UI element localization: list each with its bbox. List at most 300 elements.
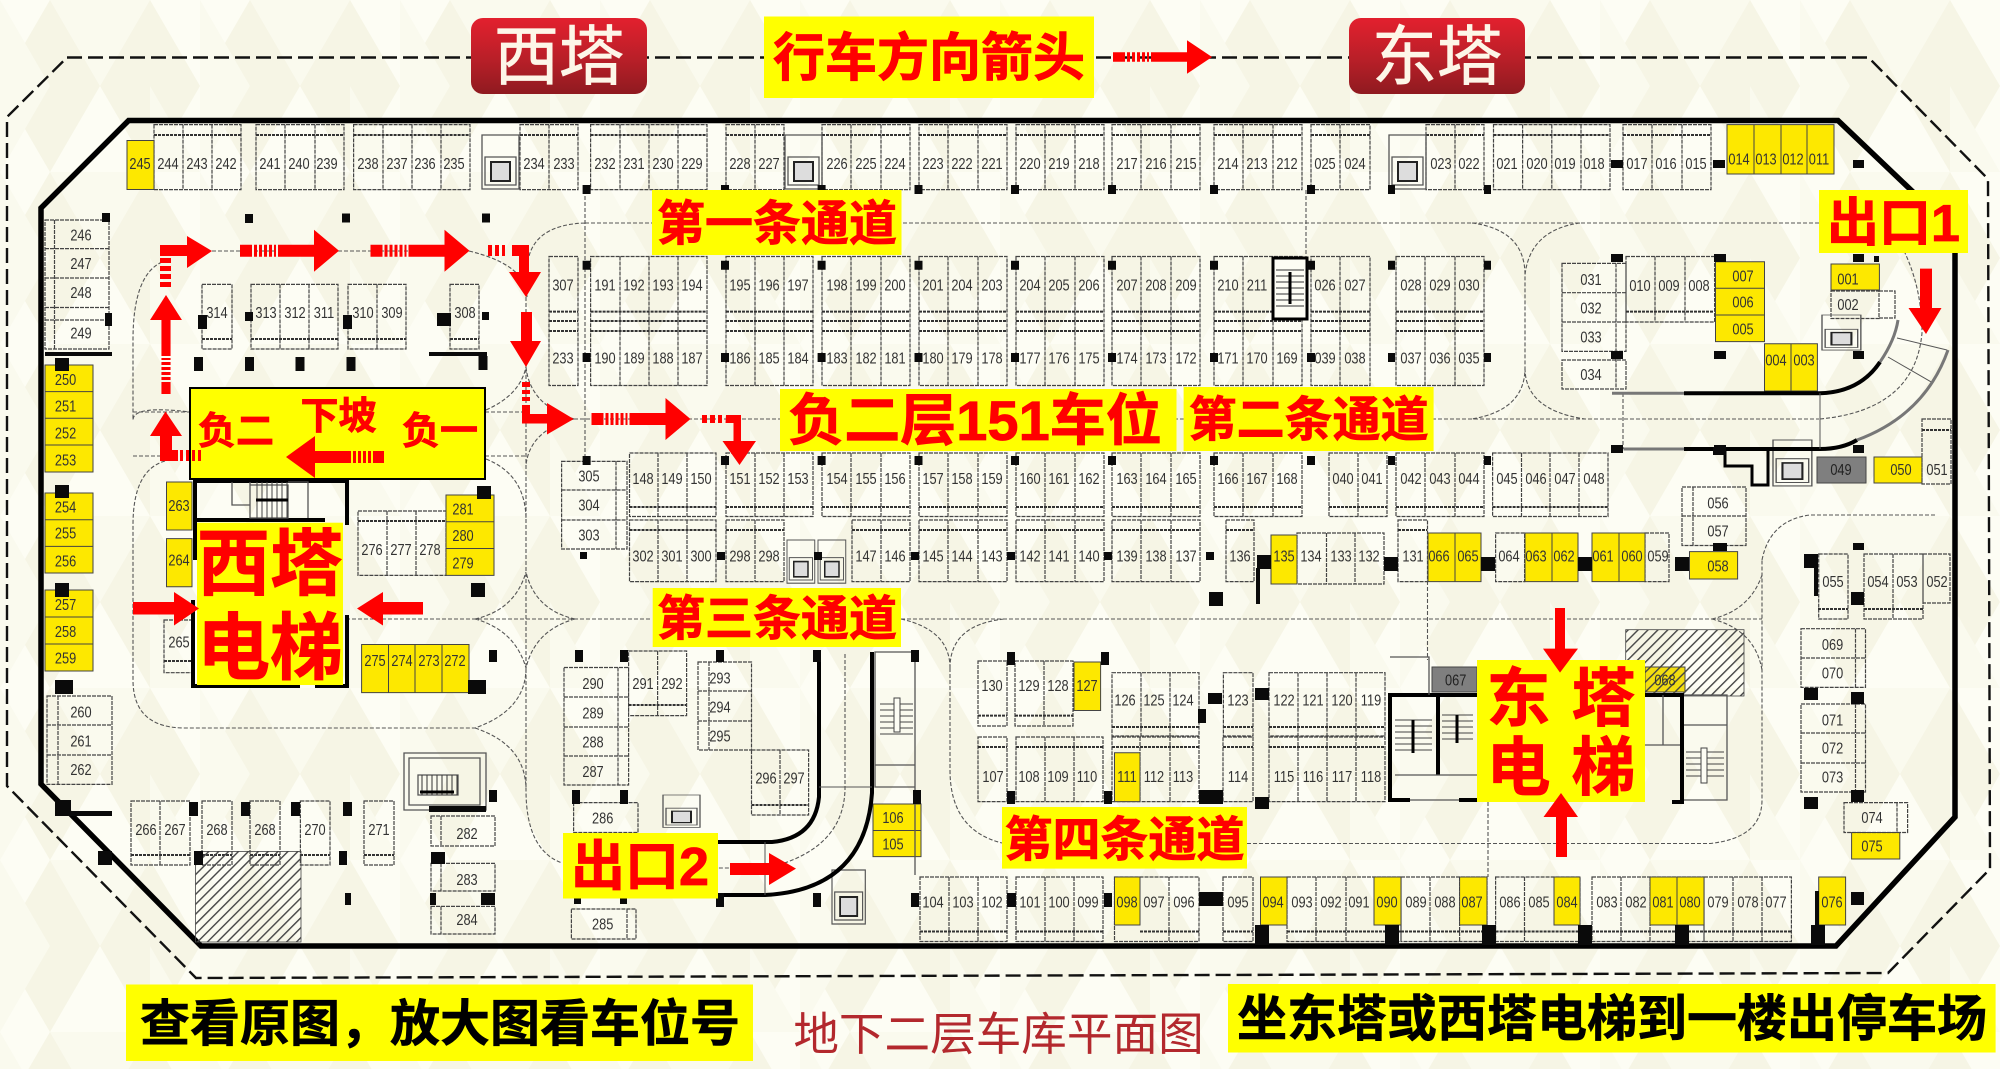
stall rows B, second aisle double row: 176	[1048, 350, 1070, 368]
label: exit 2: 出口2	[571, 837, 709, 897]
bottom stall row: 078	[1737, 894, 1759, 912]
footer: title: 地下二层车库平面图	[793, 1009, 1204, 1060]
south-west stalls 266-271, 282-284: 266	[135, 822, 157, 839]
stall row A, top wall: 230	[652, 156, 674, 173]
west side stalls: 261	[70, 733, 92, 751]
stall row A, top wall: 025	[1314, 156, 1336, 173]
stall rows B, second aisle double row: 192	[623, 277, 645, 295]
badge: west tower: 西塔	[494, 20, 624, 93]
stall row C: 158	[951, 471, 973, 488]
label: down ramp: 负二	[198, 411, 274, 453]
north-east stalls 001-010, 031-034: 032	[1580, 300, 1602, 318]
stall row D: 142	[1019, 548, 1041, 566]
stall row A, top wall: 238	[357, 156, 379, 173]
stall rows B, second aisle double row: 039	[1314, 350, 1336, 368]
stalls around west tower 263-281: 273	[418, 653, 440, 670]
south-west stalls 266-271, 282-284: 268	[254, 822, 276, 839]
stall row C: 045	[1496, 471, 1518, 488]
stall row A, top wall: 223	[922, 156, 944, 173]
east core stalls 107-130: 111	[1117, 769, 1137, 786]
stall row A, top wall: 220	[1019, 156, 1041, 173]
bottom stall row: 076	[1821, 894, 1843, 912]
stall row A, top wall: 012	[1782, 151, 1804, 169]
stall row D: 132	[1358, 548, 1380, 566]
stalls 285-305	[562, 461, 809, 939]
south-west stalls 266-271, 282-284: 268	[206, 822, 228, 839]
stall row A, top wall: 024	[1344, 156, 1366, 173]
bottom stall row: 101	[1019, 894, 1041, 912]
central-west island stalls 308-314: 308	[454, 305, 476, 322]
stall row A, top wall	[127, 125, 1834, 190]
west side stalls: 259	[55, 650, 76, 668]
arrow: route up from ramp	[150, 412, 201, 461]
stall rows B, second aisle double row: 208	[1145, 277, 1167, 295]
east stalls 049-057, 069-075: 054	[1867, 574, 1889, 591]
arrow: route corner to east 2	[522, 382, 574, 434]
label: down ramp: 负一	[402, 411, 478, 453]
bottom stall row: 092	[1320, 894, 1342, 912]
stall row D: 147	[855, 548, 877, 566]
stalls around west tower 263-281: 281	[452, 501, 474, 519]
east core stalls 107-130: 130	[981, 678, 1003, 695]
north-east stalls 001-010, 031-034: 004	[1765, 352, 1787, 370]
exit 1 ramp	[1612, 320, 1948, 485]
label: west tower elevator: 西塔	[197, 524, 343, 605]
stall row D: 141	[1048, 548, 1070, 566]
west side stalls: 255	[55, 525, 76, 543]
east stalls 049-057, 069-075: 074	[1861, 810, 1883, 827]
stall row A, top wall: 213	[1246, 156, 1268, 173]
bottom stall row: 081	[1652, 894, 1674, 912]
bottom stall row: 098	[1116, 894, 1138, 912]
stair and walls of west tower	[193, 481, 347, 686]
central-west island stalls 308-314: 314	[206, 305, 228, 322]
stall rows B, second aisle double row: 035	[1458, 350, 1480, 368]
stall rows B, second aisle double row: 026	[1314, 277, 1336, 295]
stalls 285-305: 297	[783, 770, 805, 788]
stall row C: 160	[1019, 471, 1041, 488]
stall row A, top wall: 212	[1276, 156, 1298, 173]
north-east stalls 001-010, 031-034: 009	[1658, 278, 1680, 295]
arrow: east elevator from north	[1543, 608, 1578, 673]
bottom stall row: 082	[1625, 894, 1647, 912]
stair core central	[875, 652, 915, 875]
stall row C: 159	[981, 471, 1003, 488]
stall rows B, second aisle double row: 203	[981, 277, 1003, 295]
stall row A, top wall: 022	[1458, 156, 1480, 173]
bottom stall row: 084	[1556, 894, 1578, 912]
bottom stall row: 083	[1596, 894, 1618, 912]
driving route arrows	[133, 230, 1942, 885]
stall rows B, second aisle double row: 199	[855, 277, 877, 295]
west side stalls: 251	[55, 398, 76, 416]
stall row D	[630, 520, 1738, 584]
stall rows B, second aisle double row: 198	[826, 277, 848, 295]
stall row C: 150	[690, 471, 712, 488]
stall row A, top wall: 225	[855, 156, 877, 173]
west side stalls: 257	[55, 597, 76, 614]
south-west stalls 266-271, 282-284: 267	[164, 822, 186, 839]
stall row D: 136	[1229, 548, 1251, 566]
stalls 285-305: 296	[755, 770, 777, 788]
stall row A, top wall: 245	[129, 156, 151, 173]
label: down ramp	[190, 388, 485, 479]
stall rows B, second aisle double row: 204	[951, 277, 973, 295]
west side stalls: 253	[55, 452, 76, 470]
stall rows B, second aisle double row: 204	[1019, 277, 1041, 295]
stall rows B, second aisle double row: 172	[1175, 350, 1197, 368]
bottom stall row	[873, 804, 1846, 942]
east stalls 049-057, 069-075: 057	[1707, 523, 1729, 541]
stalls around west tower 263-281: 278	[419, 542, 441, 559]
stall rows B, second aisle double row: 038	[1344, 350, 1366, 368]
stall row D: 060	[1621, 548, 1643, 566]
label: east tower elevator: 电	[1486, 732, 1550, 804]
stall row A, top wall: 228	[729, 156, 751, 173]
stalls around west tower 263-281: 277	[390, 542, 412, 559]
label: down ramp: 下坡	[300, 396, 377, 438]
label: east tower elevator	[1477, 660, 1645, 804]
label: east tower elevator: 塔	[1572, 663, 1636, 735]
stall row D: 066	[1428, 548, 1450, 566]
bottom stall row: 103	[952, 894, 974, 912]
bottom stall row: 099	[1077, 894, 1099, 912]
badge: east tower: 东塔	[1372, 20, 1502, 93]
exit 2 ramp	[718, 652, 872, 895]
west side stalls: 258	[55, 624, 76, 641]
bottom stall row: 088	[1434, 894, 1456, 912]
stall row A, top wall: 243	[186, 156, 208, 173]
stall rows B, second aisle double row: 207	[1116, 277, 1138, 295]
bottom stall row: 102	[981, 894, 1003, 912]
stall row C: 154	[826, 471, 848, 488]
north-east stalls 001-010, 031-034: 007	[1732, 268, 1754, 286]
arrow: ramp direction	[286, 436, 384, 478]
bottom stall row: 079	[1707, 894, 1729, 912]
stall row C: 153	[787, 471, 809, 488]
stall row A, top wall: 244	[157, 156, 179, 173]
arrow: route east 2	[370, 230, 470, 272]
stalls around west tower 263-281: 276	[361, 542, 383, 559]
stall rows B, second aisle double row: 197	[787, 277, 809, 295]
south-west stalls 266-271, 282-284: 270	[304, 822, 326, 839]
stall row A, top wall: 234	[523, 156, 545, 173]
bottom stall row: 105	[882, 836, 904, 854]
west side stalls: 249	[70, 325, 92, 343]
arrow: exit 1	[1908, 269, 1942, 334]
stall rows B, second aisle double row: 209	[1175, 277, 1197, 295]
east stalls 049-057, 069-075: 072	[1822, 740, 1843, 758]
bottom stall row: 086	[1499, 894, 1521, 912]
stall rows B, second aisle double row: 188	[652, 350, 674, 368]
stall row D: 145	[922, 548, 944, 566]
label: east tower elevator: 梯	[1572, 732, 1636, 804]
stall row A, top wall: 231	[623, 156, 645, 173]
stall row A, top wall: 023	[1430, 156, 1452, 173]
label: first aisle: 第一条通道	[657, 198, 897, 251]
bottom stall row: 087	[1461, 894, 1483, 912]
stalls 285-305: 305	[578, 468, 600, 486]
stall row D: 298	[758, 548, 780, 566]
stall rows B, second aisle double row: 205	[1048, 277, 1070, 295]
stall row A, top wall: 237	[386, 156, 408, 173]
west side stalls: 254	[55, 499, 76, 517]
stall row A, top wall: 241	[259, 156, 281, 173]
stall row A, top wall: 014	[1728, 151, 1750, 169]
bottom stall row: 097	[1143, 894, 1165, 912]
west side stalls: 248	[70, 285, 92, 302]
south-west stalls 266-271, 282-284: 284	[456, 912, 478, 929]
east core stalls 107-130: 121	[1302, 692, 1324, 710]
elevator shafts	[482, 135, 1861, 924]
central-west island stalls 308-314	[202, 284, 479, 349]
stall rows B, second aisle double row: 027	[1344, 277, 1366, 295]
stall rows B, second aisle double row: 185	[758, 350, 780, 368]
arrow: route corner to south	[488, 245, 541, 297]
stall rows B, second aisle double row: 183	[826, 350, 848, 368]
arrow: exit 2	[730, 853, 796, 885]
stall rows B, second aisle double row: 184	[787, 350, 809, 368]
stalls 285-305: 289	[582, 705, 604, 723]
east core stalls 107-130: 109	[1047, 769, 1069, 786]
bottom stall row: 106	[882, 810, 904, 827]
stalls 285-305: 294	[709, 699, 731, 717]
stalls 285-305: 303	[578, 527, 600, 545]
stalls 285-305: 285	[592, 916, 613, 934]
south-west stalls 266-271, 282-284: 282	[456, 826, 478, 843]
stall row A, top wall: 221	[981, 156, 1003, 173]
north-east stalls 001-010, 031-034: 008	[1688, 278, 1710, 295]
stall rows B, second aisle double row: 029	[1429, 277, 1451, 295]
stall rows B, second aisle double row: 186	[729, 350, 751, 368]
east stalls 049-057, 069-075	[1682, 419, 1951, 859]
stall row A, top wall: 015	[1685, 156, 1707, 173]
stall row D: 302	[632, 548, 654, 566]
stalls around west tower 263-281	[164, 482, 494, 693]
east core stalls 107-130: 112	[1144, 769, 1164, 786]
label: second aisle: 第二条通道	[1189, 394, 1429, 447]
stall rows B, second aisle double row: 195	[729, 277, 751, 295]
stalls 285-305: 288	[582, 734, 604, 752]
structural columns	[45, 160, 1879, 945]
stall row D: 061	[1592, 548, 1614, 566]
east stalls 049-057, 069-075: 050	[1890, 462, 1912, 479]
arrow: west elevator from west	[133, 592, 199, 626]
stall row C: 041	[1361, 471, 1383, 488]
bottom stall row: 096	[1173, 894, 1195, 912]
east core stalls 107-130: 114	[1228, 769, 1248, 786]
stall row A, top wall: 232	[594, 156, 616, 173]
stall row A, top wall: 229	[681, 156, 703, 173]
central-west island stalls 308-314: 309	[381, 305, 403, 322]
stall rows B, second aisle double row: 030	[1458, 277, 1480, 295]
stall rows B, second aisle double row: 037	[1400, 350, 1422, 368]
stall row D: 139	[1116, 548, 1138, 566]
stall rows B, second aisle double row: 036	[1429, 350, 1451, 368]
arrow: route east 3	[592, 398, 690, 440]
stall row A, top wall: 239	[316, 156, 338, 173]
legend: driving direction arrow label	[764, 16, 1094, 98]
stall row A, top wall: 216	[1145, 156, 1167, 173]
arrow: west elevator from east	[357, 592, 423, 626]
stall rows B, second aisle double row: 181	[884, 350, 906, 368]
stall row D: 063	[1525, 548, 1547, 566]
stalls around west tower 263-281: 280	[452, 528, 474, 545]
arrow: route south	[510, 312, 541, 367]
east stalls 049-057, 069-075: 071	[1822, 712, 1843, 730]
stalls around west tower 263-281: 264	[168, 552, 190, 570]
stall rows B, second aisle double row: 211	[1247, 277, 1267, 295]
central-west island stalls 308-314: 312	[284, 305, 306, 322]
east core stalls 107-130: 119	[1361, 692, 1381, 710]
stall rows B, second aisle double row: 210	[1217, 277, 1239, 295]
west side stalls: 246	[70, 227, 92, 245]
floor plan	[41, 120, 1955, 946]
arrow: route east 1	[240, 230, 339, 272]
bottom stall row: 093	[1291, 894, 1313, 912]
stall rows B, second aisle double row: 178	[981, 350, 1003, 368]
west side stalls: 247	[70, 256, 92, 273]
stall rows B, second aisle double row: 170	[1246, 350, 1268, 368]
stairwell 1272	[1273, 258, 1307, 319]
stall rows B, second aisle double row: 233	[552, 350, 574, 368]
stall row C: 042	[1400, 471, 1422, 488]
stall row C: 166	[1217, 471, 1239, 488]
stall row A, top wall: 215	[1175, 156, 1197, 173]
stall rows B, second aisle double row: 187	[681, 350, 703, 368]
stalls 285-305: 290	[582, 676, 604, 693]
special stalls 067, 068: 068	[1654, 672, 1676, 690]
special stalls 067, 068: 067	[1445, 672, 1466, 690]
stall rows B, second aisle double row: 194	[681, 277, 703, 295]
footer: elevator note: 坐东塔或西塔电梯到一楼出停车场	[1237, 991, 1987, 1047]
stall rows B, second aisle double row: 180	[922, 350, 944, 368]
stalls around west tower 263-281: 263	[168, 498, 190, 515]
stall row D: 059	[1647, 548, 1669, 566]
west side stalls: 260	[70, 704, 92, 722]
stall row A, top wall: 222	[951, 156, 973, 173]
stalls 285-305: 291	[632, 676, 654, 693]
east core stalls 107-130: 122	[1273, 692, 1295, 710]
stall row C: 168	[1276, 471, 1298, 488]
stall rows B, second aisle double row: 182	[855, 350, 877, 368]
stall rows B, second aisle double row: 175	[1078, 350, 1100, 368]
central-west island stalls 308-314: 311	[314, 305, 334, 322]
stalls 285-305: 286	[592, 810, 613, 828]
west side stalls: 250	[55, 372, 76, 389]
stall rows B, second aisle double row: 206	[1078, 277, 1100, 295]
stall rows B, second aisle double row: 169	[1276, 350, 1298, 368]
east stalls 049-057, 069-075: 051	[1926, 462, 1948, 479]
stall row A, top wall: 020	[1526, 156, 1548, 173]
east core stalls 107-130: 120	[1331, 692, 1353, 710]
east core stalls 107-130: 128	[1047, 678, 1069, 695]
stall rows B, second aisle double row: 173	[1145, 350, 1167, 368]
bottom stall row: 100	[1048, 894, 1070, 912]
stall rows B, second aisle double row: 190	[594, 350, 616, 368]
stall row D: 133	[1330, 548, 1352, 566]
stalls around west tower 263-281: 265	[168, 634, 190, 652]
stall row A, top wall: 016	[1655, 156, 1677, 173]
east stalls 049-057, 069-075: 053	[1896, 574, 1918, 591]
stall row D: 065	[1457, 548, 1479, 566]
footer: view hint: 查看原图，放大图看车位号	[140, 996, 740, 1052]
stall row D: 137	[1175, 548, 1197, 566]
east stalls 049-057, 069-075: 056	[1707, 495, 1729, 513]
stall row D: 058	[1707, 558, 1729, 576]
east stalls 049-057, 069-075: 070	[1822, 665, 1843, 683]
west side stalls: 262	[70, 762, 92, 779]
stall row C: 165	[1175, 471, 1197, 488]
stall row C: 157	[922, 471, 944, 488]
stall row A, top wall: 218	[1078, 156, 1100, 173]
stall row D: 301	[661, 548, 683, 566]
stalls around west tower 263-281: 275	[364, 653, 386, 670]
stalls 285-305: 287	[582, 764, 604, 781]
stall row C: 164	[1145, 471, 1167, 488]
stalls 285-305: 293	[709, 670, 731, 688]
stall row A, top wall: 226	[826, 156, 848, 173]
north-east stalls 001-010, 031-034: 005	[1732, 321, 1754, 339]
bottom stall row: 095	[1227, 894, 1249, 912]
stall rows B, second aisle double row: 201	[922, 277, 944, 295]
east core stalls 107-130: 123	[1227, 692, 1249, 710]
east core stalls 107-130: 126	[1114, 692, 1136, 710]
north-east stalls 001-010, 031-034: 001	[1837, 271, 1859, 289]
east tower stair core	[1390, 657, 1727, 802]
stall row A, top wall: 240	[288, 156, 310, 173]
bottom stall row: 094	[1262, 894, 1284, 912]
stall row C: 044	[1458, 471, 1480, 488]
stall rows B, second aisle double row: 177	[1019, 350, 1041, 368]
arrow: route up	[150, 295, 182, 394]
label: exit 1: 出口1	[1827, 195, 1960, 253]
hatched area east	[1626, 630, 1744, 696]
stall row C: 149	[661, 471, 683, 488]
stall row C: 151	[729, 471, 751, 488]
stall row C: 156	[884, 471, 906, 488]
east core stalls 107-130: 110	[1077, 769, 1097, 786]
north-east stalls 001-010, 031-034: 003	[1793, 352, 1815, 370]
stall rows B, second aisle double row: 179	[951, 350, 973, 368]
label: third aisle: 第三条通道	[657, 593, 897, 646]
stall row A, top wall: 219	[1048, 156, 1070, 173]
bottom stall row: 077	[1765, 894, 1787, 912]
stall row A, top wall: 217	[1116, 156, 1138, 173]
stall row A, top wall: 242	[215, 156, 237, 173]
stall row C: 148	[632, 471, 654, 488]
stall row D: 140	[1078, 548, 1100, 566]
east stalls 049-057, 069-075: 073	[1822, 769, 1843, 787]
stalls around west tower 263-281: 274	[391, 653, 413, 670]
north-east stalls 001-010, 031-034	[1562, 256, 1895, 391]
east core stalls 107-130: 113	[1173, 769, 1193, 786]
east stalls 049-057, 069-075: 069	[1822, 637, 1843, 654]
outer wall	[41, 120, 1955, 946]
east stalls 049-057, 069-075: 049	[1830, 462, 1852, 479]
stall row A, top wall: 227	[758, 156, 780, 173]
stall row C: 163	[1116, 471, 1138, 488]
bottom stall row: 091	[1348, 894, 1370, 912]
east core stalls 107-130: 115	[1274, 769, 1294, 786]
north-east stalls 001-010, 031-034: 034	[1580, 367, 1602, 384]
stall row D: 300	[690, 548, 712, 566]
special stalls 067, 068	[1432, 667, 1685, 692]
stall row A, top wall: 017	[1626, 156, 1648, 173]
bottom stall row: 089	[1405, 894, 1427, 912]
stall rows B, second aisle double row: 191	[594, 277, 616, 295]
stall row A, top wall: 235	[443, 156, 465, 173]
